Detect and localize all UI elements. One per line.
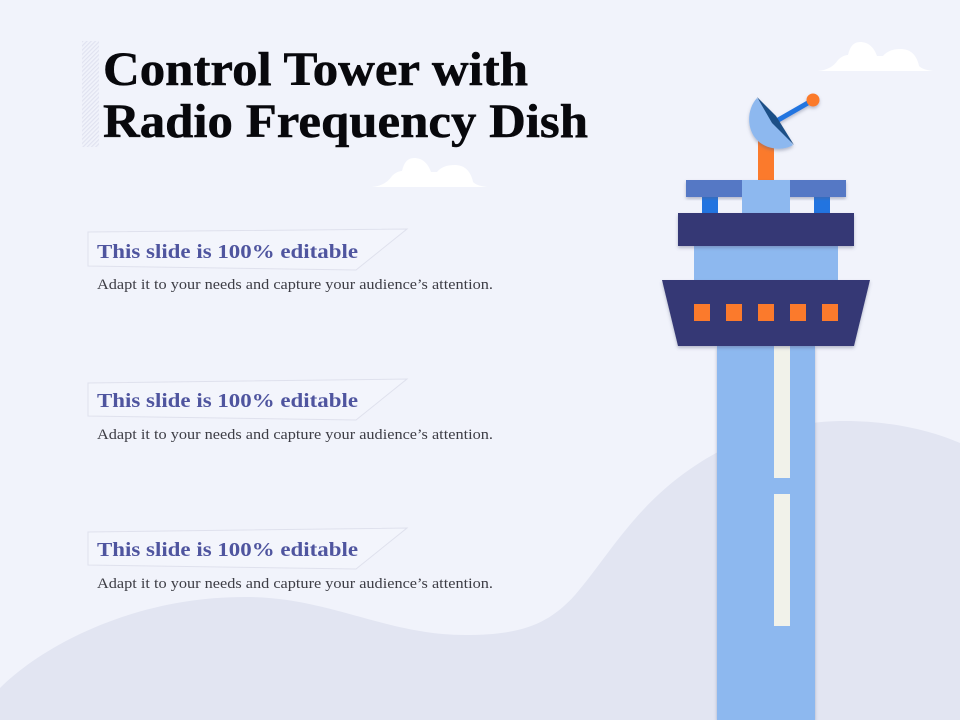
banner 3 [88,528,407,569]
body 2: Adapt it to your needs and capture your audience’s attention. [97,427,493,443]
body 1: Adapt it to your needs and capture your audience’s attention. [97,277,493,293]
dish arm [773,100,813,123]
cloud: right [818,42,933,71]
banner 2 [88,379,407,420]
heading 1: This slide is 100% editable [97,242,358,263]
tower shaft [717,346,815,720]
dish bowl [749,98,793,149]
item 1 [88,229,493,293]
shaft stripes [774,346,790,626]
dish rim [757,97,794,145]
title: Radio Frequency Dish [103,95,588,148]
observation deck [662,280,870,346]
dish tip [806,94,820,106]
control tower [662,94,870,720]
roof bar [686,180,846,197]
icon: radio dish [749,94,820,149]
title [103,43,588,148]
middle section [694,246,838,280]
item 2 [88,379,493,443]
roof supports [702,197,830,213]
body 3: Adapt it to your needs and capture your audience’s attention. [97,576,493,592]
cloud: left [372,158,487,187]
deck windows [694,304,838,321]
title: Control Tower with [103,43,528,96]
background hill [0,421,960,720]
mast [758,140,774,180]
title accent hatch [82,41,99,147]
roof centre block [742,180,790,213]
heading 3: This slide is 100% editable [97,540,358,561]
banner 1 [88,229,407,270]
dark band [678,213,854,246]
item 3 [88,528,493,592]
heading 2: This slide is 100% editable [97,391,358,412]
